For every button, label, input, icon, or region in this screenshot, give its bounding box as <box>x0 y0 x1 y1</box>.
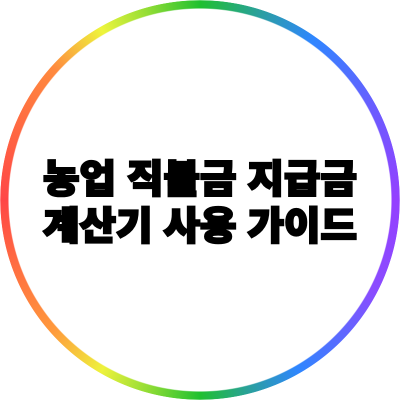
title line 1: 농업 직불금 지급금 <box>43 158 357 202</box>
title line 2: 계산기 사용 가이드 <box>43 205 357 249</box>
